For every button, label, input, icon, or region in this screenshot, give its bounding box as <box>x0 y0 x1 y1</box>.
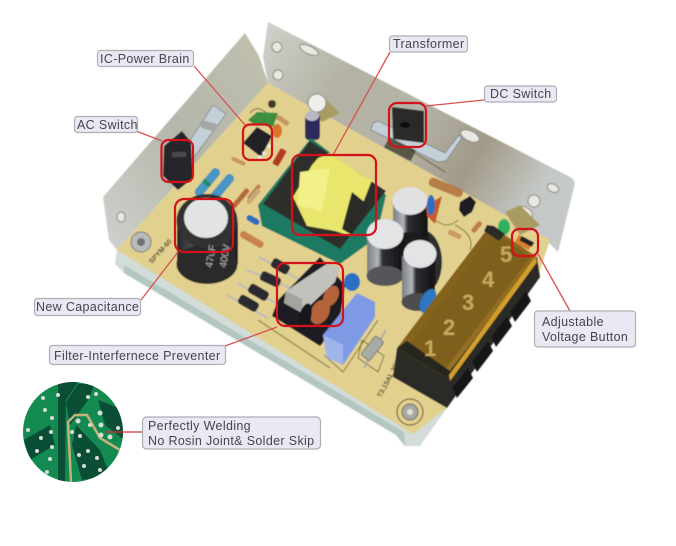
board silkscreen outlines <box>250 109 471 372</box>
label: Transformer: Transformer <box>393 37 464 51</box>
large capacitor: 47uF <box>204 244 219 269</box>
filter inductor <box>272 257 345 346</box>
label: Adjustable Voltage Button <box>534 311 636 347</box>
tan trace <box>68 415 120 482</box>
label: Filter-Interfernece Preventer: Filter-Interfernece Preventer <box>54 349 220 363</box>
label: IC-Power Brain: IC-Power Brain <box>100 52 190 66</box>
small board resistors <box>247 184 495 284</box>
label: New Capacitance: New Capacitance <box>36 300 139 314</box>
wall mounting holes <box>117 42 560 222</box>
terminal numbers <box>424 242 512 361</box>
power supply product photo <box>103 22 575 446</box>
adjustable voltage trimmer <box>515 235 534 250</box>
fuse <box>361 330 386 368</box>
left metal wall <box>103 33 268 250</box>
rear metal wall <box>263 22 575 252</box>
IC chip <box>243 127 272 159</box>
solder joints <box>26 392 120 474</box>
label: Perfectly Welding: No Rosin Joint& Solder Skip <box>148 434 314 448</box>
label: Adjustable Voltage Button: Voltage Button <box>542 330 628 344</box>
red highlight boxes <box>162 103 538 326</box>
label: Perfectly Welding <box>142 417 320 449</box>
terminal numbers: 2 <box>443 315 455 340</box>
blue X capacitor <box>323 273 375 365</box>
label: Perfectly Welding: Perfectly Welding <box>148 419 251 433</box>
dark copper areas <box>24 382 124 482</box>
right capacitors <box>366 187 442 311</box>
silkscreen fuse text: T3.15AL 250V <box>377 355 404 399</box>
terminal numbers: 4 <box>482 267 495 292</box>
terminal numbers: 3 <box>462 290 474 315</box>
circular solder detail <box>23 382 142 482</box>
metal tray base <box>115 250 447 446</box>
terminal numbers: 5 <box>500 242 512 267</box>
AC bracket and switch <box>163 105 226 190</box>
diodes <box>227 257 298 318</box>
label: AC Switch: AC Switch <box>77 118 138 132</box>
board screw mounts <box>131 94 540 425</box>
callout lines <box>136 52 570 346</box>
blue resistors <box>193 166 261 226</box>
large capacitor: 400V <box>218 243 233 269</box>
tan resistor, film cap, transistor <box>426 177 510 235</box>
transformer <box>258 138 386 264</box>
terminal block <box>393 225 540 408</box>
circuit board <box>117 83 550 434</box>
blue disc capacitor <box>416 286 440 316</box>
terminal numbers: 1 <box>424 336 436 361</box>
green film capacitor <box>248 112 278 127</box>
large capacitor <box>176 194 238 284</box>
DC bracket and switch <box>371 107 462 162</box>
orange disc parts and resistors <box>231 114 299 249</box>
label: Filter-Interfernece Preventer <box>50 346 226 364</box>
label: DC Switch: DC Switch <box>490 87 552 101</box>
small blue capacitor <box>305 111 320 140</box>
silkscreen model text: SPYM-60 <box>148 238 174 265</box>
label: Adjustable Voltage Button: Adjustable <box>542 315 604 329</box>
